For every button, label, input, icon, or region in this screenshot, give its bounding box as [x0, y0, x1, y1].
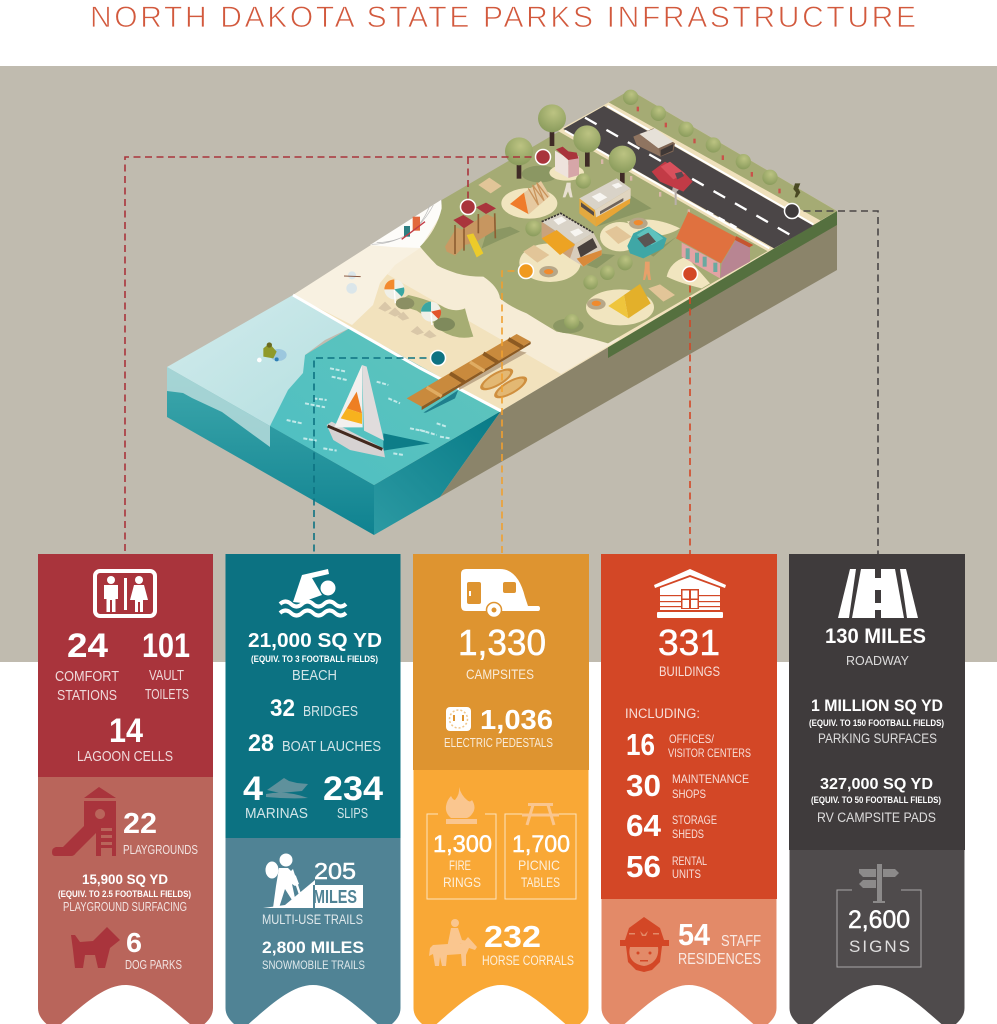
stat: rental units: UNITS: [672, 867, 701, 881]
stat: staff residences: 54: [678, 917, 711, 952]
connector: water: [314, 350, 446, 554]
stat: storage sheds: [626, 808, 717, 843]
grass and road layer: [420, 90, 837, 343]
stat: playground surfacing: PLAYGROUND SURFACING: [63, 900, 187, 914]
playground structure: [445, 203, 520, 257]
sailboat: [327, 365, 430, 457]
vehicles: red car: [652, 162, 693, 192]
text: including: INCLUDING:: [625, 706, 700, 721]
stat: playground surfacing: (EQUIV. TO 2.5 FOOTBALL FIELDS): [58, 889, 191, 899]
stat: rv campsite pads: RV CAMPSITE PADS: [817, 810, 936, 825]
stat: horse corrals: [482, 919, 574, 968]
stat: campsites: CAMPSITES: [466, 666, 534, 682]
orange tent: [510, 181, 550, 215]
icon: swimmer: [280, 569, 346, 616]
stat: lagoon cells: 14: [109, 712, 143, 750]
water ripples: [287, 368, 450, 455]
stat: staff residences: STAFF: [721, 933, 761, 950]
vehicles: motorhome and trailer: [542, 178, 667, 267]
stat: bridges: BRIDGES: [303, 703, 358, 720]
trailer: [542, 213, 602, 267]
panel: water recreation: [226, 554, 400, 1024]
stat: maintenance shops: MAINTENANCE: [672, 772, 749, 786]
trees: [505, 104, 636, 183]
dock shadow: [458, 350, 527, 390]
stat: beach: 21,000 SQ YD: [248, 630, 382, 652]
fire rings: [539, 218, 648, 310]
icon: camper trailer: [461, 569, 540, 618]
ice fisher: [257, 342, 287, 362]
stat: comfort stations: STATIONS: [57, 687, 117, 704]
beach chairs: [378, 302, 437, 338]
stat: fire rings: [427, 814, 496, 899]
icon: picnic table: [522, 804, 559, 825]
icon: dog: [71, 927, 120, 968]
visitor center house: [676, 212, 753, 278]
stat: storage sheds: SHEDS: [672, 827, 704, 841]
stat: signs: SIGNS: [849, 937, 910, 956]
stat: horse corrals: 232: [484, 919, 541, 954]
stat: vault toilets: [142, 627, 190, 703]
stat: beach: (EQUIV. TO 3 FOOTBALL FIELDS): [251, 654, 378, 664]
umbrellas: [384, 279, 441, 325]
motorhome: [579, 178, 631, 227]
stat: beach: BEACH: [292, 667, 337, 684]
stat: multi-use trails: MILES: [313, 887, 357, 907]
stat: offices: 16: [626, 727, 655, 762]
back row bushes: [623, 90, 778, 185]
stat: parking surfaces: (EQUIV. TO 150 FOOTBALL FIELDS): [809, 718, 944, 728]
stat: vault toilets: 101: [142, 627, 190, 665]
stat: rv campsite pads: (EQUIV. TO 50 FOOTBALL FIELDS): [811, 795, 941, 805]
stat: vault toilets: VAULT: [149, 667, 184, 684]
stat: maintenance shops: [626, 768, 749, 803]
stat: roadway: ROADWAY: [846, 653, 909, 668]
panel: buildings: [601, 554, 777, 1024]
stat: boat launches: [248, 730, 381, 757]
stat: marinas: 4: [243, 770, 263, 808]
ice surface: [167, 295, 350, 426]
icon: playground: [52, 787, 116, 856]
stat: snowmobile trails: 2,800 MILES: [262, 938, 364, 957]
water surface: [270, 295, 501, 485]
road sign figure: [793, 183, 800, 197]
stat: snowmobile trails: [262, 938, 365, 972]
panel: camping: [413, 554, 589, 1024]
stat: bridges: [270, 695, 358, 722]
stat: roadway: 130 MILES: [825, 625, 926, 648]
icon: horse rider: [429, 919, 477, 966]
grey road sign: [672, 185, 679, 205]
stat: playgrounds: PLAYGROUNDS: [123, 843, 198, 857]
stat: boat launches: 28: [248, 730, 274, 757]
stat: staff residences: RESIDENCES: [678, 951, 761, 968]
bushes: [525, 173, 633, 329]
stat: beach: [248, 630, 382, 684]
stat: lagoon cells: [77, 712, 173, 765]
stat: playground surfacing: 15,900 SQ YD: [82, 871, 168, 887]
stat: marinas: [243, 770, 308, 822]
stat: signs: [837, 890, 921, 967]
stat: electric pedestals: [444, 704, 553, 750]
stat: offices: OFFICES/: [669, 732, 715, 746]
stat: dog parks: DOG PARKS: [125, 958, 182, 972]
stat: playground surfacing: [58, 871, 191, 914]
stat: rv campsite pads: 327,000 SQ YD: [820, 776, 933, 793]
connector: buildings: [682, 266, 698, 554]
stat: picnic tables: TABLES: [521, 874, 560, 890]
connector: restrooms: [125, 150, 550, 554]
stat: rental units: [626, 849, 707, 884]
panel: sanitation: [38, 554, 213, 1024]
stat: rental units: 56: [626, 849, 661, 884]
block side faces: [167, 211, 837, 535]
teal car: [627, 227, 667, 258]
dock pilings: [423, 390, 458, 413]
stat: buildings: [658, 622, 720, 679]
icon: hiker: [263, 854, 363, 908]
stat: electric pedestals: ELECTRIC PEDESTALS: [444, 735, 553, 750]
beach objects: [344, 203, 531, 413]
stat: picnic tables: PICNIC: [518, 857, 560, 873]
stat: vault toilets: TOILETS: [145, 686, 189, 703]
stat: playgrounds: 22: [123, 808, 157, 840]
stat: multi-use trails: MULTI-USE TRAILS: [262, 911, 363, 927]
stat: dog parks: [125, 927, 182, 972]
stat: snowmobile trails: SNOWMOBILE TRAILS: [262, 958, 365, 972]
rowboats: [477, 364, 530, 402]
stat: multi-use trails: 205: [314, 858, 356, 884]
snow area: [293, 200, 442, 325]
stat: maintenance shops: 30: [626, 768, 661, 803]
stat: signs: 2,600: [848, 906, 910, 934]
stat: rv campsite pads: [811, 776, 941, 825]
dock: [407, 334, 531, 410]
isometric park scene: [125, 90, 878, 554]
icon: fire: [446, 787, 477, 824]
stat: picnic tables: [505, 814, 576, 899]
stat: maintenance shops: SHOPS: [672, 787, 706, 801]
icon: road: [838, 569, 918, 618]
people: [563, 183, 651, 280]
stat: slips: [323, 770, 383, 822]
stat: storage sheds: 64: [626, 808, 662, 843]
shoreline foam: [293, 295, 501, 411]
stat: buildings: BUILDINGS: [659, 664, 720, 679]
stat: roadway: [825, 625, 926, 668]
stat: boat launches: BOAT LAUCHES: [282, 738, 381, 755]
yellow tent: [608, 284, 651, 318]
stat: lagoon cells: LAGOON CELLS: [77, 748, 173, 765]
stat: campsites: 1,330: [458, 622, 546, 663]
stat: buildings: 331: [658, 622, 720, 663]
land surface: [293, 90, 837, 411]
icon: building: [654, 569, 726, 618]
stat: storage sheds: STORAGE: [672, 813, 717, 827]
grass island: [397, 295, 473, 338]
grass shadows: [522, 166, 677, 333]
icon: ranger: [620, 917, 669, 972]
stat: offices: [626, 727, 751, 762]
road: [557, 102, 821, 252]
connector: roads: [784, 204, 878, 554]
stat: comfort stations: 24: [67, 627, 108, 665]
background panel: [0, 66, 997, 662]
icon: electric outlet: [446, 707, 471, 731]
stat: bridges: 32: [270, 695, 295, 722]
restroom building: [549, 147, 584, 181]
icon: restrooms: [95, 571, 155, 616]
stat: horse corrals: HORSE CORRALS: [482, 953, 574, 968]
connector: campsites: [502, 264, 534, 554]
stat: slips: 234: [323, 770, 383, 808]
sand patches: [501, 188, 710, 325]
snowman: [344, 271, 361, 294]
light sand strip: [380, 215, 620, 374]
stat: staff residences: [678, 917, 761, 968]
water objects: [257, 342, 450, 457]
vehicles: van: [633, 128, 693, 192]
stat: fire rings: 1,300: [433, 831, 492, 858]
icon: signpost: [859, 864, 899, 903]
stat: fire rings: RINGS: [443, 874, 481, 890]
stat: multi-use trails: [262, 858, 363, 927]
stat: parking surfaces: 1 MILLION SQ YD: [811, 696, 943, 715]
road posts: [601, 107, 781, 214]
stat: parking surfaces: PARKING SURFACES: [818, 731, 937, 746]
stat: offices: VISITOR CENTERS: [668, 746, 751, 760]
ski tracks: [372, 205, 433, 244]
stat: fire rings: FIRE: [449, 857, 471, 873]
picnic tables: [478, 178, 675, 302]
stat: playgrounds: [123, 808, 198, 857]
stat: electric pedestals: 1,036: [480, 704, 553, 735]
icon: boat: [266, 778, 308, 798]
stat: comfort stations: [55, 627, 119, 704]
skiers: [402, 217, 425, 239]
title: NORTH DAKOTA STATE PARKS INFRASTRUCTURE: [90, 1, 916, 34]
stat: dog parks: 6: [126, 927, 142, 958]
stat: rental units: RENTAL: [672, 854, 707, 868]
stat: slips: SLIPS: [337, 805, 368, 822]
stat: picnic tables: 1,700: [512, 831, 570, 858]
panel: roads: [789, 554, 965, 1024]
stat: campsites: [458, 622, 546, 682]
stat: parking surfaces: [809, 696, 944, 746]
stat: comfort stations: COMFORT: [55, 668, 119, 685]
stat: marinas: MARINAS: [245, 805, 308, 822]
